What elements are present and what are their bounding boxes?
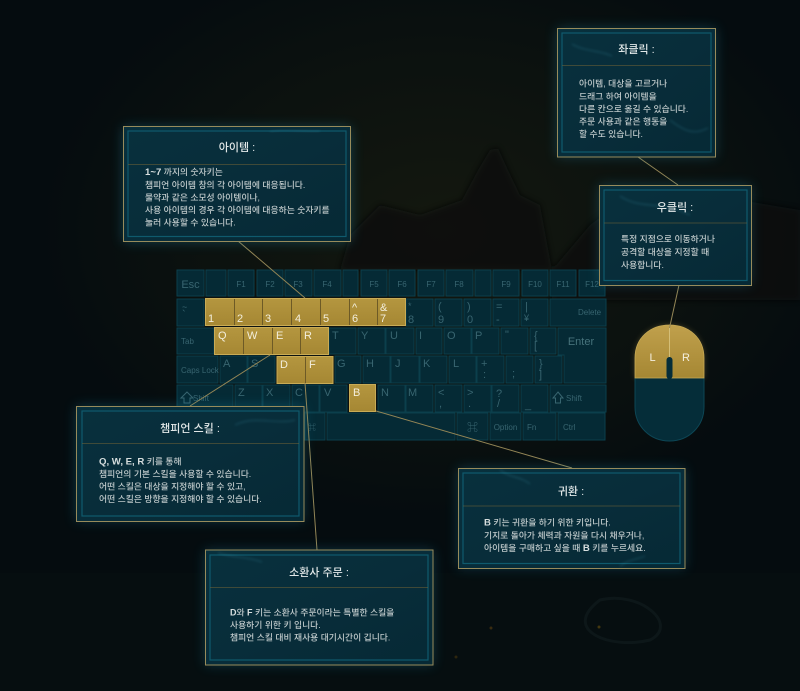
home key row <box>177 356 562 383</box>
number key row: 9 <box>438 314 444 326</box>
body text <box>579 78 688 139</box>
highlighted skill keys Q W E R: E <box>276 330 283 342</box>
function key row: F6 <box>397 280 407 289</box>
shift key row: , <box>439 398 442 410</box>
shift key row: M <box>408 387 417 399</box>
highlighted item keys 1-7: 5 <box>323 313 329 325</box>
number key row: = <box>496 301 502 313</box>
number key row: Delete <box>578 308 602 317</box>
shift key row: > <box>467 387 473 399</box>
shift key row: C <box>295 387 303 399</box>
number key row: - <box>496 314 500 326</box>
function key row: F4 <box>322 280 332 289</box>
function key row <box>177 270 605 296</box>
body text <box>230 606 394 642</box>
mouse lower body <box>635 378 704 441</box>
number key row: | <box>525 301 528 313</box>
QWERTY key row <box>177 328 556 354</box>
highlighted item keys 1-7: & <box>380 302 388 314</box>
highlighted item keys 1-7 <box>206 298 406 326</box>
home key row: S <box>251 358 258 370</box>
bottom key row: Option <box>494 423 517 432</box>
home key row: : <box>483 369 486 381</box>
body text: 주문 사용과 같은 행동을 <box>579 116 667 126</box>
home key row: ; <box>512 368 515 380</box>
body text: Q, W, E, R 키를 통해 <box>99 456 182 468</box>
panel: 좌클릭 <box>557 28 716 157</box>
function key row: F2 <box>265 280 275 289</box>
home key row: A <box>223 358 231 370</box>
QWERTY key row: Y <box>361 330 369 342</box>
QWERTY key row: [ <box>534 340 537 352</box>
mouse L label: L <box>649 352 656 364</box>
body text: 어떤 스킬은 대상을 지정해야 할 수 있고, <box>99 480 246 492</box>
shift key row: X <box>266 387 274 399</box>
QWERTY key row: O <box>447 330 456 342</box>
heading: 좌클릭 : <box>618 43 655 56</box>
QWERTY key row: P <box>475 330 482 342</box>
function key row: F12 <box>585 280 599 289</box>
function key row: F1 <box>236 280 246 289</box>
body text: 사용합니다. <box>621 259 664 270</box>
highlighted skill keys Q W E R <box>214 328 328 354</box>
shift key row: < <box>438 387 444 399</box>
body text: 눌러 사용할 수 있습니다. <box>145 216 236 228</box>
body text: 할 수도 있습니다. <box>579 128 643 139</box>
body text: 1~7 까지의 숫자키는 <box>145 167 223 178</box>
number key row: 0 <box>467 314 473 326</box>
shift key row: Z <box>238 387 245 399</box>
highlighted skill keys Q W E R: Q <box>218 330 227 342</box>
function key row: F9 <box>501 280 511 289</box>
highlighted summoner keys D F <box>277 356 333 384</box>
number key row: ) <box>467 301 471 313</box>
mouse scroll wheel <box>666 357 672 379</box>
heading: 소환사 주문 : <box>289 566 349 579</box>
enter key <box>558 328 606 383</box>
body text <box>484 516 646 554</box>
body text: 기지로 돌아가 체력과 자원을 다시 채우거나, <box>484 530 644 540</box>
home key row: G <box>337 358 346 370</box>
body text: 챔피언 아이템 창의 각 아이템에 대응됩니다. <box>145 179 305 190</box>
shift key row <box>177 385 606 412</box>
number key row: ` <box>182 309 186 321</box>
panel: 우클릭 <box>599 185 752 286</box>
highlighted item keys 1-7: 3 <box>265 313 271 325</box>
body text <box>621 233 715 270</box>
keyboard <box>177 270 606 440</box>
body text: 아이템을 구매하고 싶을 때 B 키를 누르세요. <box>484 542 646 554</box>
function key row: F11 <box>556 280 570 289</box>
home key row: J <box>395 358 400 370</box>
shift key row: V <box>324 387 332 399</box>
highlighted item keys 1-7: 2 <box>237 313 243 325</box>
home key row: Caps Lock <box>181 366 220 375</box>
QWERTY key row: { <box>534 330 538 342</box>
highlighted recall key B: B <box>353 387 360 399</box>
QWERTY key row: " <box>505 329 509 341</box>
highlighted skill keys Q W E R: R <box>304 330 312 342</box>
heading: 아이템 : <box>219 141 255 154</box>
shift key row: ? <box>496 388 502 400</box>
body text: 챔피언 스킬 대비 재사용 대기시간이 깁니다. <box>230 632 390 642</box>
body text: 특정 지점으로 이동하거나 <box>621 233 715 244</box>
highlighted item keys 1-7: 6 <box>352 313 358 325</box>
highlighted summoner keys D F: F <box>309 359 316 371</box>
mouse right button <box>670 325 704 378</box>
highlighted item keys 1-7: ^ <box>352 302 358 314</box>
panel: 귀환 <box>458 468 685 568</box>
body text: 다른 칸으로 옮길 수 있습니다. <box>579 103 688 114</box>
body text: B 키는 귀환을 하기 위한 키입니다. <box>484 516 611 528</box>
function key row: F8 <box>454 280 464 289</box>
bottom key row: Fn <box>527 423 536 432</box>
home key row: L <box>453 358 459 370</box>
number key row: ~ <box>182 302 187 312</box>
highlighted item keys 1-7: 1 <box>208 313 214 325</box>
home key row: K <box>423 358 431 370</box>
body text: 사용하기 위한 키 입니다. <box>230 619 321 630</box>
body text: D와 F 키는 소환사 주문이라는 특별한 스킬을 <box>230 606 394 618</box>
bottom key row: Ctrl <box>563 423 576 432</box>
home key row: } <box>539 358 543 370</box>
panel: 챔피언 스킬 <box>76 406 304 522</box>
panel: 아이템 <box>123 126 351 242</box>
QWERTY key row: I <box>419 330 422 342</box>
bottom key row <box>305 413 605 440</box>
panel: 소환사 주문 <box>205 550 433 665</box>
body text <box>145 167 330 228</box>
function key row: F5 <box>369 280 379 289</box>
shift key row: . <box>468 398 471 410</box>
body text: 물약과 같은 소모성 아이템이나, <box>145 192 260 202</box>
mouse R label: R <box>682 352 690 364</box>
function key row: F10 <box>528 280 542 289</box>
connector lines <box>190 157 678 550</box>
QWERTY key row: Tab <box>181 337 194 346</box>
enter key: Enter <box>568 336 594 348</box>
body text <box>99 456 262 504</box>
home key row: + <box>481 358 487 370</box>
highlighted item keys 1-7: 7 <box>380 313 386 325</box>
number key row: ( <box>438 301 442 313</box>
function key row: F3 <box>293 280 303 289</box>
shift key row: N <box>381 387 389 399</box>
mouse <box>635 285 704 441</box>
shift key row: _ <box>524 399 532 411</box>
highlighted summoner keys D F: D <box>280 359 288 371</box>
shift key row: Shift <box>193 394 210 403</box>
heading: 귀환 : <box>558 485 584 498</box>
bottom key row: ⌘ <box>467 421 478 434</box>
body text: 공격할 대상을 지정할 때 <box>621 246 709 257</box>
QWERTY key row: T <box>332 330 339 342</box>
home key row: H <box>366 358 374 370</box>
number key row <box>177 299 606 326</box>
shift key row: / <box>497 398 501 410</box>
number key row: * <box>408 301 412 311</box>
shift key row: Shift <box>566 394 583 403</box>
body text: 드래그 하여 아이템을 <box>579 90 657 102</box>
body text: 챔피언의 기본 스킬을 사용할 수 있습니다. <box>99 468 251 479</box>
heading: 우클릭 : <box>657 201 693 214</box>
function key row: F7 <box>426 280 436 289</box>
bottom key row: ⌘ <box>308 423 316 432</box>
highlighted skill keys Q W E R: W <box>247 330 258 342</box>
body text: 어떤 스킬은 방향을 지정해야 할 수 있습니다. <box>99 493 262 504</box>
body text: 사용 아이템의 경우 각 아이템에 대응하는 숫자키를 <box>145 204 330 215</box>
number key row: ¥ <box>523 313 530 323</box>
function key row: Esc <box>181 279 200 291</box>
highlighted recall key B <box>350 384 376 412</box>
body text: 아이템, 대상을 고르거나 <box>579 78 667 88</box>
home key row: ] <box>539 369 542 381</box>
highlighted item keys 1-7: 4 <box>295 313 301 325</box>
heading: 챔피언 스킬 : <box>160 421 220 435</box>
number key row: 8 <box>408 314 414 326</box>
QWERTY key row: U <box>390 330 398 342</box>
mouse left button <box>635 325 670 378</box>
